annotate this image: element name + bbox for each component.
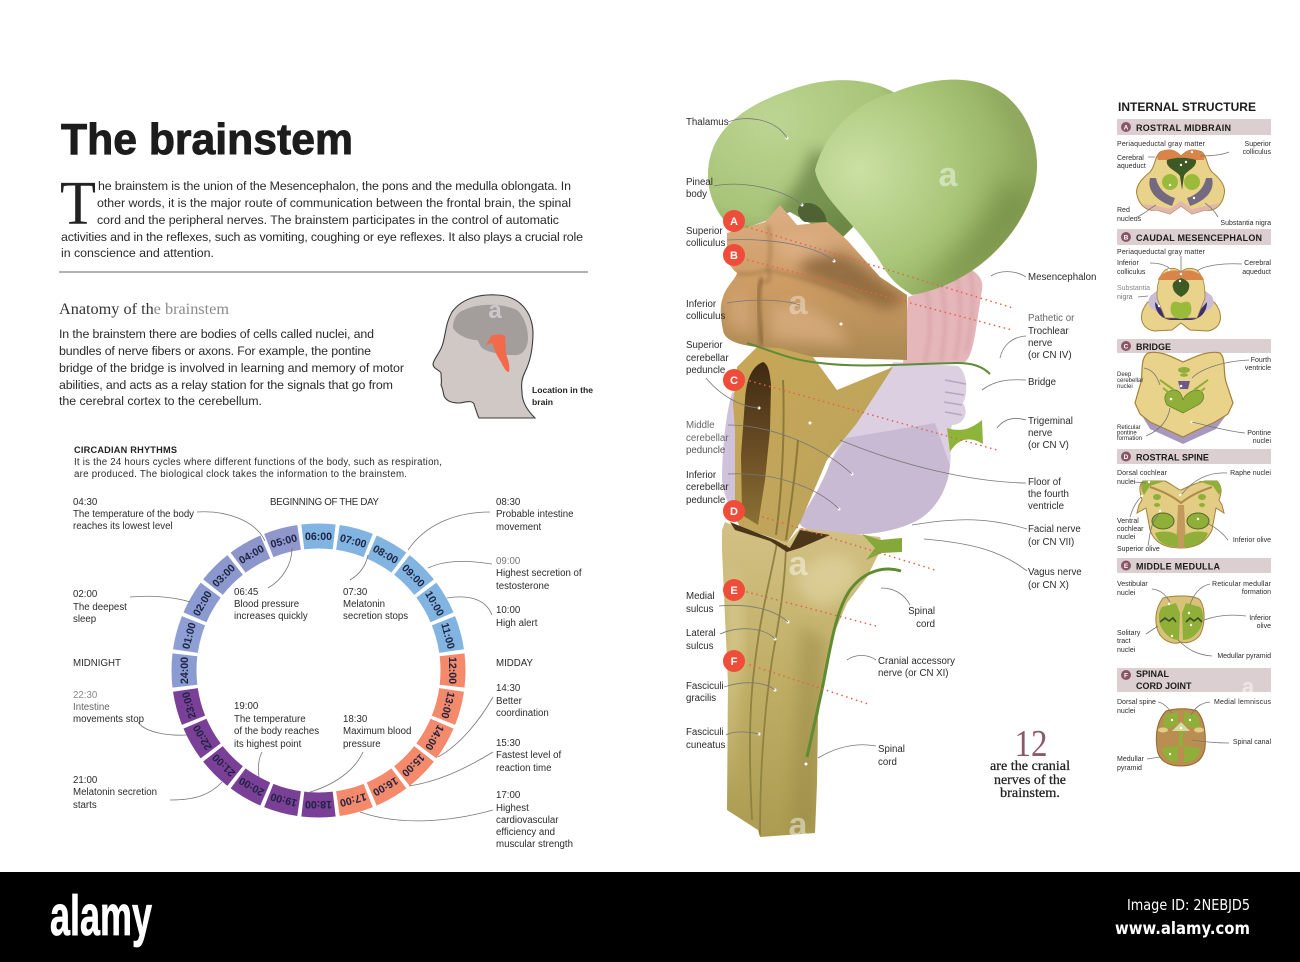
- brainstem labels left: Middle: [686, 420, 715, 431]
- chart: 24 hour clock ring: 01:00: [180, 621, 199, 651]
- brainstem labels left: Lateral: [686, 628, 716, 639]
- cross-section A: [1137, 150, 1224, 214]
- clock labels: its highest point: [234, 739, 302, 750]
- clock labels: reaction time: [496, 763, 551, 774]
- chart: 24 hour clock ring: 13:00: [438, 690, 457, 720]
- labels F: nuclei: [1117, 708, 1136, 715]
- circadian rhythms heading: CIRCADIAN RHYTHMS: [74, 445, 177, 455]
- brainstem illustration: [708, 80, 1041, 844]
- labels E: [1117, 581, 1272, 660]
- brainstem labels left: gracilis: [686, 693, 716, 704]
- clock labels: BEGINNING OF THE DAY: [270, 497, 380, 508]
- clock labels: 17:00: [496, 790, 521, 801]
- labels E: Inferior: [1249, 615, 1272, 622]
- chart: 24 hour clock ring: 18:00: [305, 798, 332, 810]
- clock labels: movements stop: [73, 714, 144, 725]
- clock labels: efficiency and: [496, 827, 555, 838]
- clock labels: Highest: [496, 803, 529, 814]
- callout: 12 cranial nerves: 12: [1014, 723, 1048, 765]
- chart: 24 hour clock ring: 05:00: [269, 532, 299, 551]
- labels A: aqueduct: [1117, 163, 1146, 170]
- header A: A: [1124, 124, 1129, 132]
- title: The brainstem: [61, 115, 353, 164]
- labels D: Dorsal cochlear: [1117, 470, 1168, 477]
- intro text block: in conscience and attention.: [61, 246, 214, 260]
- header C: BRIDGE: [1136, 342, 1171, 352]
- cross-section C: [1135, 352, 1233, 444]
- brainstem labels right: Facial nerve: [1028, 524, 1081, 535]
- circadian rhythms heading: [74, 445, 442, 480]
- clock labels: High alert: [496, 618, 538, 629]
- chart: 24 hour clock ring: 03:00: [210, 562, 238, 590]
- footer bar: [0, 872, 1300, 962]
- chart: 24 hour clock ring: 04:00: [237, 543, 267, 567]
- labels E: tract: [1117, 638, 1131, 645]
- labels C: Deep: [1117, 372, 1132, 378]
- brainstem labels right: (or CN IV): [1028, 350, 1072, 361]
- section markers A to F: [723, 210, 745, 672]
- brainstem labels right: (or CN VII): [1028, 537, 1074, 548]
- watermarks: a: [939, 156, 959, 194]
- labels D: nuclei: [1117, 534, 1136, 541]
- labels E: formation: [1242, 589, 1271, 596]
- labels B: Substantia: [1117, 285, 1150, 292]
- header C: [1117, 339, 1271, 353]
- internal structure heading: INTERNAL STRUCTURE: [1118, 100, 1256, 114]
- subheading: anatomy: Anatomy of th e brainstem: [59, 301, 229, 318]
- clock labels: Maximum blood: [343, 726, 411, 737]
- callout: 12 cranial nerves: are the cranial: [990, 758, 1070, 773]
- intro text block: [60, 170, 583, 260]
- colliculi tan: [721, 205, 907, 360]
- brain: [453, 305, 528, 355]
- chart: 24 hour clock ring: 16:00: [370, 774, 400, 798]
- header F: [1117, 668, 1271, 699]
- intro text block: other words, it is the major route of communication between the frontal brain, the spinal: [97, 196, 571, 210]
- circadian rhythms heading: It is the 24 hours cycles where different functions of the body, such as respiration,: [74, 457, 442, 468]
- brainstem labels left: cerebellar: [686, 482, 729, 493]
- clock labels: starts: [73, 800, 97, 811]
- nerve: trigeminal: [947, 420, 983, 452]
- callout: 12 cranial nerves: [990, 723, 1070, 800]
- watermarks: [789, 156, 959, 844]
- clock labels: 08:30: [496, 497, 521, 508]
- clock labels: Probable intestine: [496, 509, 574, 520]
- clock labels: Intestine: [73, 702, 110, 713]
- labels F: pyramid: [1117, 765, 1142, 772]
- labels D: Superior olive: [1117, 546, 1160, 553]
- left thalamus shading: [770, 145, 854, 236]
- brainstem labels left: body: [686, 189, 707, 200]
- header F: CORD JOINT: [1136, 681, 1192, 691]
- bridge lilac lower facet: [800, 423, 950, 534]
- brainstem labels left: peduncle: [686, 495, 725, 506]
- brainstem labels right: nerve: [1028, 338, 1052, 349]
- logo: alamy: alamy: [50, 884, 152, 948]
- clock labels: 22:30: [73, 690, 98, 701]
- labels A: Cerebral: [1117, 155, 1144, 162]
- brainstem labels left: Inferior: [686, 299, 717, 310]
- website: www.alamy.com: [1115, 919, 1250, 939]
- labels C: nuclei: [1253, 438, 1271, 445]
- labels B: nigra: [1117, 294, 1133, 301]
- clock labels: increases quickly: [234, 611, 308, 622]
- target dots: [758, 136, 854, 766]
- labels D: Raphe nuclei: [1230, 470, 1271, 477]
- brainstem labels left: peduncle: [686, 445, 725, 456]
- labels B: [1117, 249, 1271, 301]
- thalamus dark joint: [798, 203, 827, 222]
- labels D: Inferior olive: [1233, 537, 1271, 544]
- label: location in the brain: [532, 385, 593, 407]
- labels F: Spinal canal: [1233, 739, 1271, 746]
- labels A: [1117, 141, 1272, 227]
- labels B: aqueduct: [1242, 269, 1271, 276]
- head watermark: a: [488, 297, 502, 324]
- panel C: bridge: [1117, 339, 1271, 445]
- clock labels: 19:00: [234, 701, 259, 712]
- header A: [1117, 119, 1271, 135]
- brainstem labels right: Cranial accessory: [878, 656, 955, 667]
- labels F: Medullar: [1117, 756, 1145, 763]
- header E: MIDDLE MEDULLA: [1136, 562, 1220, 572]
- cross-section B: [1142, 268, 1220, 331]
- brainstem labels left: [686, 117, 729, 751]
- clock labels: Highest secretion of: [496, 568, 582, 579]
- brainstem labels left: Inferior: [686, 470, 717, 481]
- labels B: Cerebral: [1244, 260, 1271, 267]
- header B: [1117, 229, 1271, 245]
- intro text block: cord and the peripheral nerves. The brainstem participates in the control of automatic: [97, 213, 559, 227]
- labels E: nuclei: [1117, 647, 1136, 654]
- brainstem labels right: (or CN V): [1028, 440, 1069, 451]
- brainstem labels left: Fasciculi: [686, 681, 724, 692]
- header F: SPINAL: [1136, 669, 1170, 679]
- colliculi shading: [730, 225, 910, 345]
- section markers A to F: E: [730, 585, 738, 597]
- brainstem labels left: colliculus: [686, 238, 725, 249]
- brainstem labels left: sulcus: [686, 641, 714, 652]
- labels A: Superior: [1245, 141, 1272, 148]
- brainstem labels right: nerve (or CN XI): [878, 668, 949, 679]
- clock labels: MIDNIGHT: [73, 658, 121, 669]
- chart: 24 hour clock ring: 19:00: [269, 790, 299, 809]
- stem highlight: [486, 334, 509, 372]
- brainstem leader lines: [706, 119, 1027, 758]
- brainstem labels right: Spinal: [878, 744, 905, 755]
- labels E: Reticular medullar: [1212, 581, 1272, 588]
- clock labels: [73, 497, 582, 850]
- labels B: Periaqueductal gray matter: [1117, 249, 1206, 256]
- clock labels: of the body reaches: [234, 726, 319, 737]
- chart: 24 hour clock ring: [171, 523, 466, 818]
- brainstem labels right: nerve: [1028, 428, 1052, 439]
- chart: 24 hour clock ring: 22:00: [191, 722, 215, 752]
- clock labels: secretion stops: [343, 611, 408, 622]
- panel D: rostral spine: [1117, 449, 1271, 553]
- brainstem labels left: Pineal: [686, 177, 713, 188]
- section markers A to F: A: [730, 216, 738, 228]
- labels A: Periaqueductal gray matter: [1117, 141, 1206, 148]
- labels C: pontine: [1117, 430, 1137, 436]
- clock labels: testosterone: [496, 581, 549, 592]
- chart: 24 hour clock ring: 11:00: [438, 622, 457, 650]
- anatomy text block: bundles of nerve fibers or axons. For example, the pontine: [59, 344, 371, 358]
- cross-section E: [1156, 596, 1204, 643]
- labels C: Reticular: [1117, 425, 1141, 431]
- drop cap: T: [60, 170, 96, 238]
- watermarks: a: [789, 545, 809, 583]
- intro text block: he brainstem is the union of the Mesencephalon, the pons and the medulla oblongata. In: [98, 179, 571, 193]
- clock leader lines: [130, 512, 493, 821]
- clock labels: pressure: [343, 739, 381, 750]
- clock labels: Melatonin: [343, 599, 385, 610]
- labels C: cerebellar: [1117, 378, 1143, 384]
- label: location in the brain: brain: [532, 397, 553, 407]
- labels A: nucleus: [1117, 216, 1142, 223]
- chart: 24 hour clock ring: 14:00: [422, 723, 446, 752]
- brainstem labels left: Superior: [686, 226, 723, 237]
- clock labels: Melatonin secretion: [73, 787, 157, 798]
- cross-section F: [1156, 709, 1205, 766]
- section cut lines: [747, 227, 1013, 704]
- callout: 12 cranial nerves: nerves of the: [994, 772, 1066, 787]
- labels E: Medullar pyramid: [1217, 653, 1271, 660]
- image id: Image ID: 2NEBJD5: [1127, 896, 1250, 914]
- brainstem labels left: colliculus: [686, 311, 725, 322]
- brainstem labels right: the fourth: [1028, 489, 1069, 500]
- panel B: caudal mesencephalon: [1117, 229, 1271, 331]
- lower medulla and spinal cord: [722, 522, 883, 837]
- clock labels: 04:30: [73, 497, 98, 508]
- labels F: Dorsal spine: [1117, 699, 1156, 706]
- section markers A to F: B: [730, 250, 738, 262]
- labels D: Ventral: [1117, 518, 1139, 525]
- header D: [1117, 449, 1271, 464]
- rear lilac peduncle: [722, 390, 745, 512]
- brainstem labels right: Vagus nerve: [1028, 567, 1082, 578]
- labels A: colliculus: [1243, 149, 1271, 156]
- cross-section D: [1137, 481, 1224, 548]
- chart: 24 hour clock ring: 12:00: [446, 657, 458, 684]
- clock labels: Fastest level of: [496, 750, 561, 761]
- intro text block: activities and in the reflexes, such as vomiting, coughing or eye reflexes. It also plays a crucial role: [61, 230, 583, 244]
- clock labels: The temperature: [234, 714, 306, 725]
- dark wedge joint: [730, 522, 830, 552]
- brainstem labels right: ventricle: [1028, 501, 1064, 512]
- clock labels: 18:30: [343, 714, 368, 725]
- header B: B: [1124, 234, 1129, 242]
- anatomy text block: abilities, and acts as a relay station for the signals that go from: [59, 378, 393, 392]
- clock labels: 09:00: [496, 556, 521, 567]
- clock labels: sleep: [73, 614, 96, 625]
- brainstem labels right: Bridge: [1028, 377, 1056, 388]
- labels E: nuclei: [1117, 590, 1136, 597]
- brainstem labels right: Spinal: [908, 606, 935, 617]
- panel A: rostral midbrain: [1117, 119, 1272, 227]
- anatomy text block: [59, 327, 404, 408]
- chart: 24 hour clock ring: 17:00: [338, 790, 368, 809]
- chart: 24 hour clock ring: 23:00: [180, 690, 199, 720]
- header C: C: [1124, 344, 1129, 350]
- clock labels: 14:30: [496, 683, 521, 694]
- brainstem labels left: cerebellar: [686, 353, 729, 364]
- clock labels: The deepest: [73, 602, 127, 613]
- watermarks: a: [789, 284, 809, 322]
- brainstem labels left: sulcus: [686, 604, 714, 615]
- section markers A to F: D: [730, 506, 738, 518]
- clock labels: 21:00: [73, 775, 98, 786]
- section markers A to F: C: [730, 375, 738, 387]
- brainstem labels left: Superior: [686, 340, 723, 351]
- brainstem labels right: [878, 272, 1096, 768]
- bridge lilac upper: [800, 362, 966, 534]
- right thalamus lobe: [815, 80, 1037, 295]
- head silhouette: [433, 295, 535, 418]
- nerve: pathetic green: [747, 343, 990, 374]
- right thalamus shading: [918, 90, 1037, 292]
- clock labels: reaches its lowest level: [73, 521, 173, 532]
- labels E: Vestibular: [1117, 581, 1148, 588]
- labels C: [1117, 357, 1271, 445]
- chart: 24 hour clock ring: 07:00: [338, 532, 368, 551]
- anatomy text block: In the brainstem there are bodies of cells called nuclei, and: [59, 327, 374, 341]
- panel F: spinal cord joint: [1117, 668, 1272, 772]
- section markers A to F: F: [731, 656, 738, 668]
- clock labels: 07:30: [343, 587, 368, 598]
- brainstem labels right: Trigeminal: [1028, 416, 1073, 427]
- chart: 24 hour clock ring: 10:00: [422, 589, 446, 619]
- chart: 24 hour clock ring: 08:00: [371, 543, 400, 567]
- brainstem labels left: peduncle: [686, 365, 725, 376]
- clock labels: coordination: [496, 708, 549, 719]
- header F: a: [1242, 674, 1255, 699]
- clock labels: 06:45: [234, 587, 258, 598]
- peduncle yellow: [733, 347, 893, 543]
- labels F: Medial lemniscus: [1214, 699, 1272, 706]
- chart: 24 hour clock ring: 09:00: [399, 562, 427, 590]
- watermarks: a: [789, 806, 809, 844]
- labels C: formation: [1117, 436, 1142, 442]
- labels C: nuclei: [1117, 384, 1133, 390]
- peduncle dark slot: [741, 362, 771, 525]
- labels D: cochlear: [1117, 526, 1144, 533]
- anatomy text block: bridge of the bridge is involved in learning and memory of motor: [59, 361, 404, 375]
- clock labels: The temperature of the body: [73, 509, 194, 520]
- chart: 24 hour clock ring: 24:00: [179, 657, 191, 684]
- header E: [1117, 558, 1271, 573]
- brainstem labels left: Thalamus: [686, 117, 729, 128]
- labels D: nuclei: [1117, 479, 1136, 486]
- callout: 12 cranial nerves: brainstem.: [1000, 785, 1060, 800]
- clock labels: MIDDAY: [496, 658, 533, 669]
- labels F: [1117, 699, 1272, 772]
- brainstem labels right: cord: [878, 757, 897, 768]
- chart: 24 hour clock ring: 02:00: [191, 589, 215, 618]
- labels A: Red: [1117, 207, 1130, 214]
- icon: head with brainstem location: [433, 295, 535, 418]
- labels D: [1117, 470, 1271, 553]
- clock labels: Blood pressure: [234, 599, 299, 610]
- label: location in the brain: Location in the: [532, 385, 593, 395]
- header F: F: [1124, 672, 1128, 680]
- labels C: Pontine: [1247, 430, 1271, 437]
- chart: 24 hour clock ring: 15:00: [399, 751, 427, 779]
- labels C: Fourth: [1251, 357, 1271, 364]
- brainstem labels left: Medial: [686, 591, 715, 602]
- chart: 24 hour clock ring: 06:00: [305, 531, 332, 543]
- header A: ROSTRAL MIDBRAIN: [1136, 123, 1231, 133]
- circadian rhythms heading: are produced. The biological clock takes the information to the brainstem.: [74, 469, 407, 480]
- labels E: olive: [1257, 623, 1271, 630]
- brainstem labels left: Fasciculi: [686, 727, 724, 738]
- brainstem labels right: Floor of: [1028, 477, 1061, 488]
- left thalamus lobe: [708, 80, 895, 240]
- clock labels: 10:00: [496, 605, 521, 616]
- nerve: cranial accessory: [807, 569, 901, 757]
- labels E: Solitary: [1117, 630, 1141, 637]
- labels C: ventricle: [1245, 365, 1271, 372]
- nerve: facial: [862, 534, 902, 560]
- bridge ridges: [944, 380, 966, 415]
- chart: 24 hour clock ring: 21:00: [210, 751, 238, 779]
- panel E: middle medulla: [1117, 558, 1272, 660]
- brainstem labels right: Mesencephalon: [1028, 272, 1096, 283]
- header B: CAUDAL MESENCEPHALON: [1136, 233, 1262, 243]
- clock labels: muscular strength: [496, 839, 573, 850]
- brainstem labels right: (or CN X): [1028, 580, 1069, 591]
- header D: D: [1124, 454, 1129, 461]
- clock labels: cardiovascular: [496, 815, 559, 826]
- clock labels: movement: [496, 522, 542, 533]
- labels B: Inferior: [1117, 260, 1139, 267]
- header E: E: [1124, 563, 1129, 570]
- brainstem labels right: cord: [916, 619, 935, 630]
- brainstem labels right: Trochlear: [1028, 326, 1069, 337]
- labels A: Substantia nigra: [1220, 220, 1271, 227]
- pink mesencephalon folds: [903, 268, 982, 364]
- brainstem labels right: Pathetic or: [1028, 313, 1075, 324]
- clock labels: 02:00: [73, 589, 98, 600]
- brainstem labels left: cuneatus: [686, 740, 725, 751]
- anatomy text block: the cerebral cortex to the cerebellum.: [59, 394, 262, 408]
- labels B: colliculus: [1117, 269, 1146, 276]
- chart: 24 hour clock ring: 20:00: [237, 774, 266, 798]
- brainstem labels left: cerebellar: [686, 433, 729, 444]
- clock labels: Better: [496, 696, 523, 707]
- header D: ROSTRAL SPINE: [1136, 452, 1209, 462]
- clock labels: 15:30: [496, 738, 521, 749]
